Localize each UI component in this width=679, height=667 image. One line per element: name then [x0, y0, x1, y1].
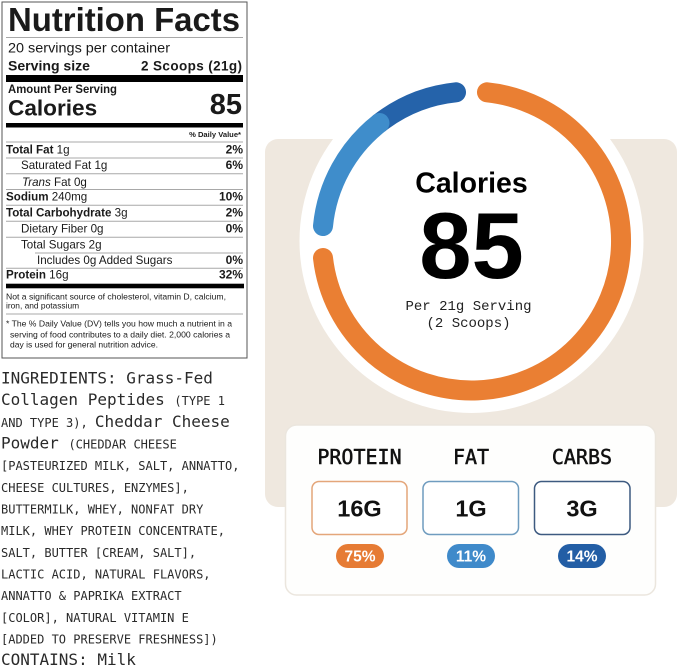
arc: fat 11% — [323, 123, 380, 226]
row: dietary fiber — [21, 222, 243, 236]
serving size row: 2 Scoops (21g) — [141, 58, 242, 74]
row: total carbohydrate — [6, 206, 243, 220]
footnote: daily value explanation — [6, 319, 232, 350]
macro: carbs: 3G — [566, 496, 598, 522]
serving size row: Serving size — [8, 58, 90, 74]
row: saturated fat: Saturated Fat 1g — [21, 159, 107, 172]
row: trans fat: Trans Fat 0g — [22, 176, 87, 189]
footnote: daily value explanation: serving of food contributes to a daily diet. 2,000 calories a — [10, 329, 230, 339]
serving size row — [8, 58, 242, 74]
macro: protein: 75% — [344, 548, 376, 566]
arc: carbs 14% — [380, 92, 456, 123]
servings per container: 20 servings per container — [8, 40, 170, 56]
label: Calories: Calories — [415, 168, 528, 200]
footnote: not a significant source — [6, 291, 226, 310]
row: sodium — [6, 190, 243, 204]
text block: ingredients: BUTTERMILK, WHEY, NONFAT DRY — [1, 502, 204, 516]
footnote: not a significant source: Not a significant source of cholesterol, vitamin D, calcium, — [6, 291, 226, 301]
macro: fat — [423, 445, 518, 568]
row: dietary fiber: Dietary Fiber 0g — [21, 223, 103, 236]
row: total carbohydrate: 2% — [226, 206, 243, 220]
macro: carbs — [534, 445, 630, 568]
row: added sugars: 0% — [226, 253, 243, 267]
text block: ingredients: [ADDED TO PRESERVE FRESHNESS]) — [1, 632, 218, 646]
row: saturated fat — [21, 158, 243, 172]
calories row: 85 — [210, 89, 242, 121]
value: 85: 85 — [419, 193, 524, 298]
text block: ingredients: SALT, BUTTER [CREAM, SALT], — [1, 546, 196, 560]
macro: carbs: CARBS — [552, 445, 612, 469]
row: sodium: 10% — [219, 190, 243, 204]
text block: ingredients: ANNATTO & PAPRIKA EXTRACT — [1, 589, 182, 603]
text block: ingredients: AND TYPE 3), Cheddar Cheese — [1, 412, 230, 431]
text block: ingredients: CHEESE CULTURES, ENZYMES], — [1, 481, 189, 495]
row: protein: Protein 16g — [6, 269, 69, 282]
row: sodium: Sodium 240mg — [6, 191, 87, 204]
macro: protein: PROTEIN — [317, 445, 402, 469]
footnote: daily value explanation: * The % Daily Value (DV) tells you how much a nutrient in a — [6, 319, 232, 329]
macro: fat: 11% — [456, 548, 486, 566]
row: added sugars — [37, 253, 243, 267]
macro: fat: FAT — [453, 445, 489, 469]
text block: ingredients: Powder (CHEDDAR CHEESE — [1, 434, 177, 452]
caption: per serving: (2 Scoops) — [426, 316, 511, 332]
panel: nutrition facts label — [2, 1, 247, 358]
row: added sugars: Includes 0g Added Sugars — [37, 254, 173, 267]
calories row: Calories — [8, 96, 97, 120]
text block: ingredients: Collagen Peptides (TYPE 1 — [1, 390, 225, 409]
row: total fat — [6, 142, 243, 156]
footnote: not a significant source: iron, and potassium — [6, 300, 79, 310]
panel: beige background — [265, 139, 677, 507]
macro: carbs: 14% — [566, 548, 598, 566]
text block: ingredients — [1, 368, 239, 667]
text block: ingredients: INGREDIENTS: Grass-Fed — [1, 368, 213, 388]
heading: Nutrition Facts: Nutrition Facts — [8, 1, 240, 38]
amount per serving: Amount Per Serving — [8, 84, 117, 96]
row: protein — [6, 268, 243, 282]
text block: ingredients: LACTIC ACID, NATURAL FLAVORS, — [1, 568, 211, 582]
calories row — [8, 89, 242, 121]
macro: protein: 16G — [337, 496, 382, 522]
row: protein: 32% — [219, 268, 243, 282]
text block: ingredients: [PASTEURIZED MILK, SALT, ANNATTO, — [1, 459, 239, 473]
macro: fat: 1G — [455, 496, 487, 522]
row: total sugars: Total Sugars 2g — [21, 238, 102, 251]
chart: calorie donut — [300, 69, 644, 413]
caption: per serving: Per 21g Serving — [405, 299, 532, 315]
text block: ingredients: [COLOR], NATURAL VITAMIN E — [1, 611, 189, 625]
row: dietary fiber: 0% — [226, 222, 243, 236]
daily value header: % Daily Value* — [189, 130, 241, 139]
row: total carbohydrate: Total Carbohydrate 3g — [6, 207, 128, 220]
macro: protein — [312, 445, 407, 568]
footnote: daily value explanation: day is used for general nutrition advice. — [10, 340, 158, 350]
caption: per serving — [405, 299, 532, 332]
arc: protein 75% — [323, 92, 621, 390]
panel: macro card — [286, 425, 656, 595]
text block: ingredients: MILK, WHEY PROTEIN CONCENTRATE, — [1, 524, 225, 538]
row: total fat: 2% — [226, 142, 243, 156]
row: saturated fat: 6% — [226, 158, 243, 172]
row: total fat: Total Fat 1g — [6, 144, 70, 156]
